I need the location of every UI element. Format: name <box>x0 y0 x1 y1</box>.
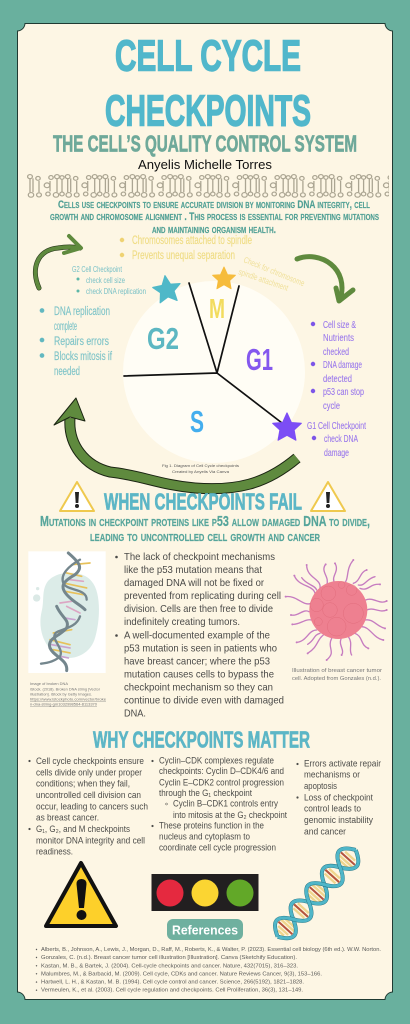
text: column 1: Cell cycle checkpoints ensure <box>36 756 144 766</box>
G1 list: checked <box>323 347 349 358</box>
text: checkpoint failure explanation: continue to divide even with damaged <box>124 694 284 706</box>
text: column 3 <box>296 759 381 836</box>
DNA image credit: iStock. (2018). Broken DNA string [Vector <box>30 688 101 692</box>
cycle disc <box>123 281 305 463</box>
text: column 1: monitor DNA integrity and cell <box>36 835 145 845</box>
M checkpoint list <box>120 235 252 262</box>
text: checkpoint failure explanation: have breast cancer; where the p53 <box>124 655 270 667</box>
icon: large warning sign <box>46 863 116 926</box>
arrow: bottom sweep <box>54 398 297 489</box>
references list <box>36 947 381 994</box>
references button <box>167 919 243 940</box>
M checkpoint label <box>237 255 306 293</box>
text: column 3: genomic instability <box>304 815 374 825</box>
phase labels: G1 <box>246 342 273 377</box>
text: checkpoint failure explanation: DNA. <box>124 707 146 719</box>
author: Anyelis Michelle Torres <box>138 158 272 172</box>
text: checkpoint failure explanation: p53 mutation is seen in patients who <box>124 642 277 654</box>
text: column 1: as breast cancer. <box>36 813 99 823</box>
text: column 1: readiness. <box>36 847 73 857</box>
text: column 2: checkpoints: Cyclin D–CDK4/6 and <box>159 766 284 776</box>
references list: Vermeulen, K., et al. (2003). Cell cycle regulation and checkpoints. Cell Proliferation, 36(3), 131–149. <box>41 988 303 994</box>
references list: Hartwell, L. H., & Kastan, M. B. (1994). Cell cycle control and cancer. Science, 266(5192), 1821–1828. <box>41 980 304 986</box>
text: checkpoint failure explanation <box>115 551 284 719</box>
icon: warning left <box>60 482 94 511</box>
phase labels: S <box>190 404 204 439</box>
title <box>105 32 311 136</box>
text: column 3: apoptosis <box>304 781 338 791</box>
text: column 2: Cyclin–CDK complexes regulate <box>159 755 274 765</box>
text: column 2: These proteins function in the <box>159 821 264 831</box>
G2 list: Blocks mitosis if <box>54 351 113 363</box>
G2 checkpoint label <box>72 264 146 296</box>
subheading <box>40 514 370 545</box>
DNA image credit: Image of broken DNA <box>30 682 69 686</box>
image: broken DNA <box>28 551 106 673</box>
M checkpoint label: spindle attachment <box>237 266 290 293</box>
tumor caption <box>292 668 382 682</box>
text: column 1: occur, leading to cancers such <box>36 801 148 811</box>
figure caption: Fig 1. Diagram of Cell Cycle checkpoints <box>162 464 239 468</box>
DNA image credit <box>30 682 106 706</box>
icon: G2 star <box>151 274 182 304</box>
G1 list: cycle <box>323 401 340 412</box>
G2 list: needed <box>54 366 80 378</box>
text: checkpoint failure explanation: The lack of checkpoint mechanisms <box>124 551 275 563</box>
text: column 3: control leads to <box>304 804 361 814</box>
subheading: leading to uncontrolled cell growth and cancer <box>90 529 321 545</box>
text: column 2: Cyclin E–CDK2 control progression <box>159 777 284 787</box>
text: column 1 <box>28 756 148 857</box>
title: CELL CYCLE <box>115 32 301 80</box>
text: checkpoint failure explanation: damaged DNA will not be fixed or <box>124 577 264 589</box>
references list: Alberts, B., Johnson, A., Lewis, J., Morgan, D., Raff, M., Roberts, K., & Walter, P. (2023). Essential cell biology (6th ed.). W.W. Norton. <box>41 947 381 953</box>
references list: Kastan, M. B., & Bartek, J. (2004). Cell-cycle checkpoints and cancer. Nature, 432(7015), 316–323. <box>41 963 298 969</box>
M checkpoint list: Prevents unequal separation <box>132 250 235 262</box>
M checkpoint list: Chromosomes attached to spindle <box>132 235 252 247</box>
text: column 3: Errors activate repair <box>304 759 381 769</box>
phase labels: G2 <box>147 321 179 356</box>
text: column 2 <box>151 755 288 853</box>
G1 checkpoint label: check DNA <box>324 434 358 445</box>
icon: DNA helix <box>269 842 364 944</box>
references button: References <box>172 924 238 938</box>
G2 checkpoint label: check DNA replication <box>86 286 146 296</box>
G1 list: Nutrients <box>323 333 354 344</box>
text: checkpoint failure explanation: like the p53 mutation means that <box>124 564 262 576</box>
text: column 2: through the G₁ checkpoint <box>159 788 253 798</box>
G2 list: Repairs errors <box>54 336 109 348</box>
text: checkpoint failure explanation: A well-documented example of the <box>124 629 270 641</box>
text: column 2: nucleus and cytoplasm to <box>159 832 250 842</box>
phase labels <box>147 293 273 439</box>
icon: M star <box>213 267 235 289</box>
text: column 3: Loss of checkpoint <box>304 792 374 802</box>
G1 list: detected <box>323 374 352 385</box>
text: checkpoint failure explanation: mutation causes cells to bypass the <box>124 668 274 680</box>
text: checkpoint failure explanation: checkpoint mechanism so they can <box>124 681 273 693</box>
references list: Gonzales, C. (n.d.). Breast cancer tumor cell illustration [Illustration]. Canva (Sketchify Education). <box>41 955 297 961</box>
icon: G1 star <box>273 413 301 440</box>
text: column 2: into mitosis at the G₂ checkpoint <box>173 810 288 820</box>
phase labels: M <box>209 293 225 324</box>
membrane strip <box>28 175 403 197</box>
G2 list: complete <box>54 321 77 333</box>
text: column 2: Cyclin B–CDK1 controls entry <box>173 799 279 809</box>
tumor caption: Illustration of breast cancer tumor <box>292 668 382 674</box>
cycle dividers <box>124 283 282 423</box>
text: checkpoint failure explanation: division. Cells are then free to divide <box>124 603 273 615</box>
image: tumor cell <box>285 559 388 661</box>
M checkpoint label: Check for chromosome <box>242 255 306 288</box>
G2 checkpoint label: check cell size <box>86 275 125 285</box>
text: column 2: coordinate cell cycle progression <box>159 843 276 853</box>
text: column 1: uncontrolled cell division can <box>36 790 141 800</box>
DNA image credit: https://www.istockphoto.com/vector/broke <box>30 698 106 702</box>
G1 list <box>311 320 364 412</box>
tumor caption: cell. Adopted from Gonzales (n.d.). <box>292 676 381 682</box>
text: column 1: conditions; when they fail, <box>36 779 130 789</box>
figure caption <box>162 464 239 474</box>
heading: when checkpoints fail: WHEN CHECKPOINTS FAIL <box>104 488 302 514</box>
references list: Malumbres, M., & Barbacid, M. (2009). Cell cycle, CDKs and cancer. Nature Reviews Cancer, 9(3), 153–166. <box>41 971 322 977</box>
text: column 3: and cancer <box>304 826 346 836</box>
G1 list: DNA damage <box>323 360 362 371</box>
G1 list: Cell size & <box>323 320 356 331</box>
G2 list: DNA replication <box>54 306 110 318</box>
DNA image credit: illustration]. iStock by Getty Images. <box>30 692 92 696</box>
G1 checkpoint label <box>307 421 366 459</box>
G1 checkpoint label: damage <box>324 448 349 459</box>
text: column 3: mechanisms or <box>304 770 360 780</box>
intro text <box>50 199 380 236</box>
DNA image credit: n-dna-string-gm1032998564-8113370 <box>30 702 97 706</box>
G1 list: p53 can stop <box>323 387 364 398</box>
icon: traffic light <box>152 874 258 911</box>
text: column 1: G₁, G₂, and M checkpoints <box>36 824 131 834</box>
arrow: top right <box>297 257 353 301</box>
G2 list <box>40 306 113 378</box>
figure caption: Created by Anyelis Via Canva <box>172 470 229 474</box>
intro text: and maintaining organism health. <box>152 224 276 236</box>
G2 checkpoint label: G2 Cell Checkpoint <box>72 264 122 274</box>
G1 checkpoint label: G1 Cell Checkpoint <box>307 421 366 432</box>
text: column 1: cells divide only under proper <box>36 767 142 777</box>
text: checkpoint failure explanation: indefinitely creating tumors. <box>124 616 240 628</box>
icon: warning right <box>311 482 345 511</box>
text: checkpoint failure explanation: prevented from replicating during cell <box>124 590 281 602</box>
arrow: top left <box>35 236 81 288</box>
